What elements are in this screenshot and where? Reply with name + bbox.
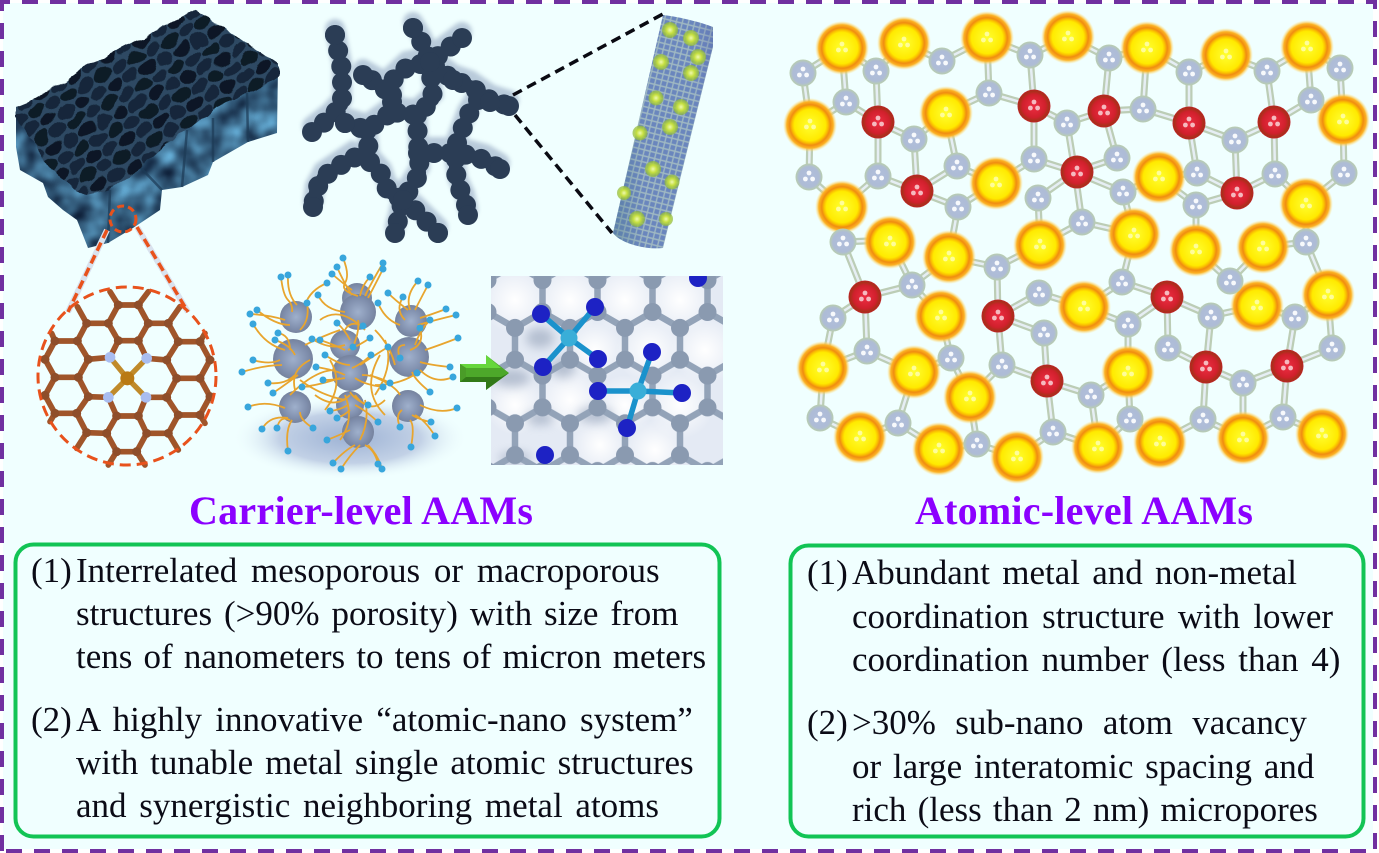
- atomic point 2: rich (less than 2 nm) micropores: [852, 790, 1318, 829]
- yellow metal atoms: [783, 10, 1370, 484]
- arrow: green block arrow: [460, 355, 509, 390]
- carrier point 1: (1): [31, 551, 72, 590]
- heading: Carrier-level AAMs: Carrier-level AAMs: [189, 488, 533, 533]
- heading: Atomic-level AAMs: Atomic-level AAMs: [915, 488, 1253, 533]
- grey atoms: [790, 42, 1358, 458]
- panel: carrier-level text box: [16, 544, 720, 836]
- carrier point 1: structures (>90% porosity) with size from: [76, 594, 678, 633]
- atomic point 2: >30% sub-nano atom vacancy: [852, 703, 1307, 742]
- atomic point 1: coordination structure with lower: [852, 597, 1333, 636]
- carrier point 2: with tunable metal single atomic structures: [76, 743, 694, 782]
- carrier point 2: and synergistic neighboring metal atoms: [76, 786, 659, 825]
- carrier point 1: [31, 551, 706, 676]
- zoom inset: metal-N4 graphene lattice: [38, 206, 216, 465]
- atomic point 1: Abundant metal and non-metal: [852, 553, 1297, 592]
- carrier point 2: [31, 700, 694, 825]
- carrier point 2: A highly innovative “atomic-nano system”: [76, 700, 693, 739]
- atomic point 1: (1): [807, 553, 848, 592]
- panel: atomic-level text box: [790, 546, 1364, 836]
- dashed zoom lines to nanotube: [513, 14, 663, 233]
- atomic point 1: coordination number (less than 4): [852, 640, 1340, 679]
- atomic point 1: [807, 553, 1340, 679]
- carrier point 1: Interrelated mesoporous or macroporous: [76, 551, 660, 590]
- illustration: N-doped graphene with metal atoms: [481, 266, 739, 480]
- atomic point 2: [807, 703, 1318, 829]
- illustration: porous carbon block: [16, 10, 278, 248]
- atomic point 2: or large interatomic spacing and: [852, 747, 1315, 786]
- illustration: atomic lattice with metal and non-metal atoms: [783, 10, 1370, 484]
- illustration: carbon nanotube with single atoms: [613, 15, 713, 248]
- illustration: nanoparticle cluster with ligands: [232, 258, 468, 480]
- atomic point 2: (2): [807, 703, 848, 742]
- carrier point 2: (2): [31, 700, 72, 739]
- red atoms: [848, 90, 1304, 398]
- carrier point 1: tens of nanometers to tens of micron meters: [76, 637, 706, 676]
- illustration: branched carbon nanofibre network: [312, 22, 509, 233]
